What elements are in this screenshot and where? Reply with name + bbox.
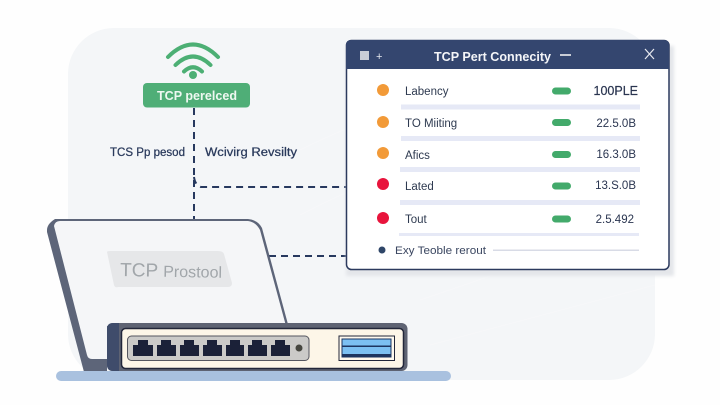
window title bar: [346, 40, 669, 69]
icon: more dots: [560, 54, 571, 56]
connector: dashed lines: [194, 108, 346, 256]
row: Lated: Lated: [405, 181, 434, 193]
row: Tout: 2.5.492: [596, 214, 634, 226]
panel: TCP port connectivity window: [346, 40, 674, 276]
row: TO Miiting: [377, 116, 636, 130]
badge: TCP status: [143, 83, 250, 108]
device base shelf: [56, 371, 451, 381]
device: network switch: [107, 323, 408, 371]
USB port: [339, 336, 394, 360]
status LED: [296, 344, 302, 352]
device: tilted router panel: [47, 219, 289, 372]
tag: TCP protocol: TCP Prostool: [120, 260, 222, 283]
row: Tout: [377, 212, 634, 226]
badge: TCP status: TCP perelced: [157, 88, 237, 103]
row: Labency: Labency: [405, 86, 449, 98]
ethernet ports: [133, 340, 290, 356]
row: TO Miiting: 22.5.0B: [596, 118, 636, 130]
window title: TCP Pert Connecity: [434, 50, 551, 64]
port strip: [128, 336, 309, 360]
icon: plus: +: [376, 51, 382, 63]
row: Lated: [377, 178, 636, 193]
background panel: [68, 28, 655, 380]
row: Labency: [377, 84, 638, 98]
label: left of connector: TCS Pp pesod: [110, 147, 185, 159]
row: Atics: Afics: [405, 150, 430, 162]
row: Lated: 13.S.0B: [595, 180, 636, 192]
icon: window menu: [360, 51, 369, 60]
legend row: Exy Teoble rerout: [395, 245, 486, 257]
row: Tout: Tout: [405, 214, 428, 226]
icon: close: [645, 49, 654, 59]
legend row: [378, 245, 639, 257]
tag: TCP protocol: [107, 251, 232, 287]
row: TO Miiting: TO Miiting: [405, 118, 457, 130]
label: right of connector: Wcivirg Revsilty: [205, 147, 297, 159]
row: Labency: 100PLE: [594, 84, 638, 98]
row: Atics: [377, 147, 636, 162]
icon: wifi signal: [168, 44, 218, 79]
row dividers: [399, 104, 640, 236]
row: Atics: 16.3.0B: [596, 149, 636, 161]
